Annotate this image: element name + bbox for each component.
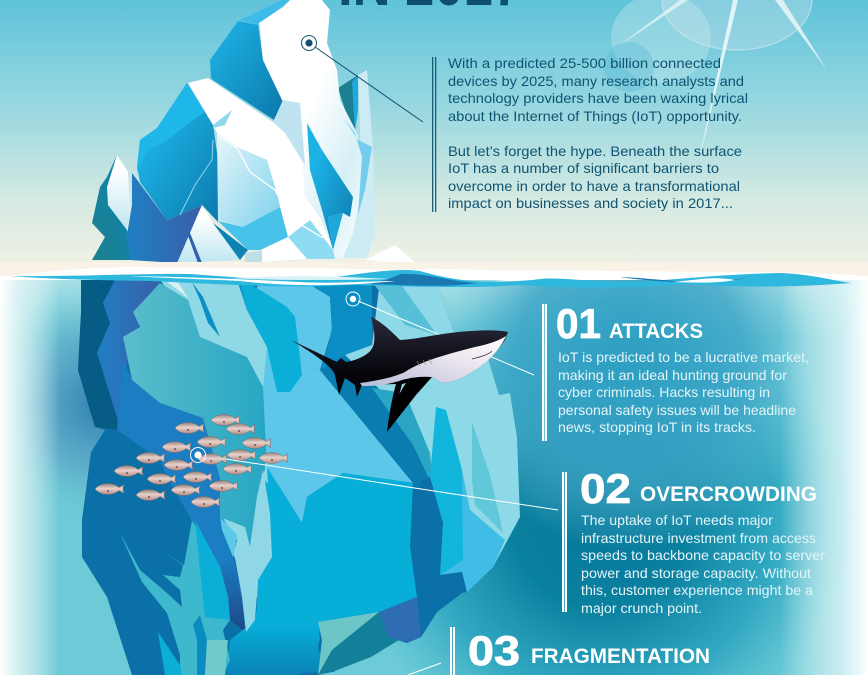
section 01: attacks: personal safety issues will be headline bbox=[558, 402, 796, 418]
shark bbox=[291, 317, 508, 432]
callout marker: attacks bbox=[346, 292, 534, 375]
intro text block: about the Internet of Things (IoT) opportunity. bbox=[448, 108, 742, 124]
callout marker: overcrowding bbox=[190, 448, 558, 510]
water surface bbox=[0, 262, 868, 288]
section 02: overcrowding: OVERCROWDING bbox=[640, 483, 817, 506]
section 01: attacks: cyber criminals. Hacks resulting in bbox=[558, 384, 770, 400]
callout marker: tip of the iceberg bbox=[302, 36, 423, 122]
section 02: overcrowding bbox=[562, 465, 825, 616]
section 01: attacks: making it an ideal hunting ground for bbox=[558, 367, 787, 383]
intro text block: But let’s forget the hype. Beneath the surface bbox=[448, 143, 742, 159]
section 01: attacks: news, stopping IoT in its tracks. bbox=[558, 419, 756, 435]
section 02: overcrowding: power and storage capacity. Without bbox=[581, 565, 811, 581]
iceberg below water bbox=[78, 280, 520, 675]
number 01: 01 bbox=[556, 300, 601, 347]
intro text block: overcome in order to have a transformational bbox=[448, 178, 740, 194]
number 02: 02 bbox=[580, 465, 631, 512]
intro text block bbox=[432, 55, 748, 212]
intro text block: technology providers have been waxing lyrical bbox=[448, 90, 748, 106]
intro text block: With a predicted 25-500 billion connected bbox=[448, 55, 721, 71]
intro text block: devices by 2025, many research analysts and bbox=[448, 73, 744, 89]
intro text block: impact on businesses and society in 2017... bbox=[448, 195, 733, 211]
iceberg above water bbox=[92, 0, 418, 265]
section 02: overcrowding: this, customer experience might be a bbox=[581, 582, 813, 598]
background: underwater bbox=[0, 270, 868, 675]
intro text block: IoT has a number of significant barriers to bbox=[448, 160, 719, 176]
background: sky bbox=[0, 0, 868, 282]
number 03: 03 bbox=[468, 627, 520, 674]
section 01: attacks bbox=[542, 300, 809, 441]
fish school bbox=[95, 415, 288, 507]
section 02: overcrowding: major crunch point. bbox=[581, 600, 702, 616]
section 02: overcrowding: The uptake of IoT needs major bbox=[581, 512, 773, 528]
section 03: fragmentation: FRAGMENTATION bbox=[531, 645, 710, 668]
section 01: attacks: IoT is predicted to be a lucrative market, bbox=[558, 349, 809, 365]
section 03: fragmentation bbox=[408, 627, 710, 675]
background: sun glare bbox=[604, 0, 827, 165]
section 02: overcrowding: infrastructure investment from access bbox=[581, 530, 816, 546]
section 01: attacks: ATTACKS bbox=[609, 320, 703, 343]
section 02: overcrowding: speeds to backbone capacity to server bbox=[581, 547, 825, 563]
